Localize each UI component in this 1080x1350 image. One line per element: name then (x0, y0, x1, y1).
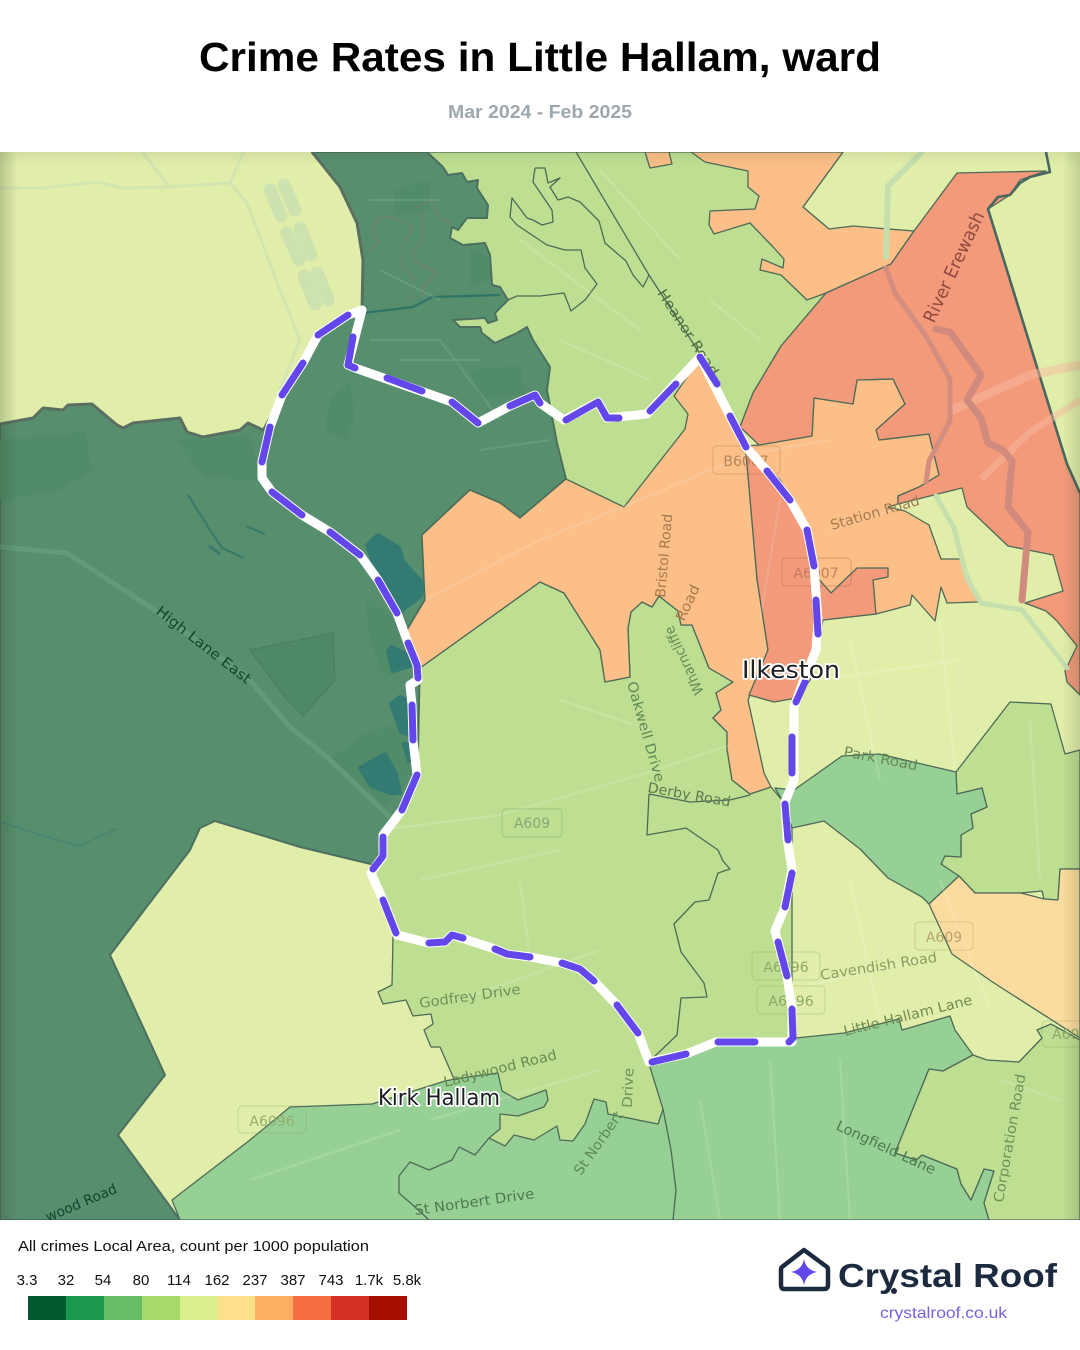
label: Godfrey Drive: Godfrey Drive (418, 982, 522, 1012)
label: Little Hallam Lane: Little Hallam Lane (842, 992, 974, 1040)
label: Station Road: Station Road (829, 493, 922, 534)
label: Ladywood Road: Ladywood Road (442, 1047, 559, 1091)
dark zone heavy edges (0, 152, 363, 437)
river boundary and rail edge (988, 152, 1080, 493)
shield: A609 east: A609 (926, 930, 962, 946)
label: Drive: Drive (620, 1068, 637, 1108)
map edge shading (0, 152, 1080, 1220)
legend title: All crimes Local Area, count per 1000 population (18, 1239, 369, 1255)
zone: east medium green (775, 754, 987, 904)
shield: A6096 west: A6096 (249, 1114, 295, 1130)
label: Wharncliffe: Wharncliffe (662, 623, 708, 697)
shield: A6096 upper (752, 952, 820, 980)
shield: A6007: A6007 (793, 566, 839, 582)
label: Oakwell Drive: Oakwell Drive (623, 680, 667, 784)
legend value labels: 1.7k (355, 1272, 384, 1289)
shield: B6007 (713, 446, 780, 474)
label: St Norbert Drive lower: St Norbert Drive (413, 1186, 535, 1219)
title: Crime Rates in Little Hallam, ward (199, 34, 881, 80)
logo: Crystal Roof (781, 1250, 1058, 1322)
label: Derby Road: Derby Road (646, 780, 732, 811)
label: Park Road: Park Road (842, 744, 919, 774)
shield: A609 (502, 809, 562, 837)
dark-area features: lakes, woods and streams (0, 180, 525, 846)
neighbourhood outlines (399, 152, 750, 1220)
ward boundary: white casing (262, 310, 818, 1062)
website url: crystalroof.co.uk (880, 1305, 1008, 1322)
shield: A6096 upper: A6096 (763, 960, 809, 976)
shield: A609 east (915, 922, 973, 950)
road: High Lane East (0, 547, 390, 817)
legend value labels: 162 (204, 1272, 230, 1289)
legend value labels: 80 (133, 1272, 149, 1289)
shield: A6096 lower: A6096 (768, 994, 814, 1010)
zone: south-central light green (371, 582, 792, 1146)
shield: A6096 west (238, 1106, 306, 1133)
legend value labels: 5.8k (393, 1272, 422, 1289)
label: Heanor Road: Heanor Road (654, 286, 722, 379)
label: wood Road: wood Road (43, 1181, 120, 1226)
zone: south-east pale orange (929, 869, 1080, 1038)
zone: south-east light green (895, 1024, 1080, 1220)
legend value labels (17, 1272, 422, 1289)
zone: north light green (400, 152, 843, 520)
legend value labels: 387 (280, 1272, 306, 1289)
faint street network (250, 170, 1080, 1220)
shield: A609: A609 (514, 816, 550, 832)
zone: small north orange (645, 152, 672, 168)
label: St Norbert Drive upper: St Norbert (571, 1108, 627, 1178)
ward boundary: purple dashes (262, 315, 818, 1062)
legend value labels: 3.3 (17, 1272, 37, 1289)
place label: Kirk Hallam: Kirk Hallam (378, 1086, 500, 1111)
road and river labels (43, 208, 1030, 1226)
legend value labels: 32 (58, 1272, 74, 1289)
subtitle: date range: Mar 2024 - Feb 2025 (448, 102, 632, 122)
zone: north orange (691, 152, 914, 300)
label: Cavendish Road: Cavendish Road (819, 950, 938, 984)
label: Bristol Road: Bristol Road (653, 513, 676, 598)
choropleth map (0, 152, 1080, 1226)
label: High Lane East: High Lane East (153, 604, 254, 688)
label: Corporation Road: Corporation Road (991, 1073, 1030, 1204)
sewage-works tanks (270, 185, 328, 304)
legend value labels: 54 (95, 1272, 111, 1289)
zone: town-centre red (745, 446, 888, 702)
shield: A6007 (782, 558, 851, 586)
zone: west dark green (0, 152, 566, 1220)
zone: east light green (941, 702, 1080, 900)
shield: A6096 lower (757, 986, 825, 1014)
zone: central orange (407, 358, 771, 794)
legend value labels: 114 (167, 1272, 191, 1289)
wordmark: Crystal Roof (838, 1257, 1058, 1294)
river and stream channels (0, 153, 1067, 668)
legend value labels: 237 (242, 1272, 268, 1289)
label: Road: Road (673, 582, 704, 624)
icon: house with star (781, 1250, 828, 1289)
shield: B6007: B6007 (723, 454, 769, 470)
label: Longfield Lane: Longfield Lane (833, 1118, 938, 1178)
legend colour scale (28, 1296, 407, 1320)
label: River Erewash: River Erewash (919, 208, 989, 326)
shield: A609 edge (1042, 1021, 1080, 1047)
zone: south medium green (172, 1016, 994, 1220)
zone: east orange (745, 379, 978, 621)
zone: east red (740, 171, 1080, 695)
road shields (238, 446, 1080, 1133)
legend value labels: 743 (318, 1272, 344, 1289)
legend (17, 1239, 422, 1320)
place label: Ilkeston: Ilkeston (742, 656, 840, 684)
